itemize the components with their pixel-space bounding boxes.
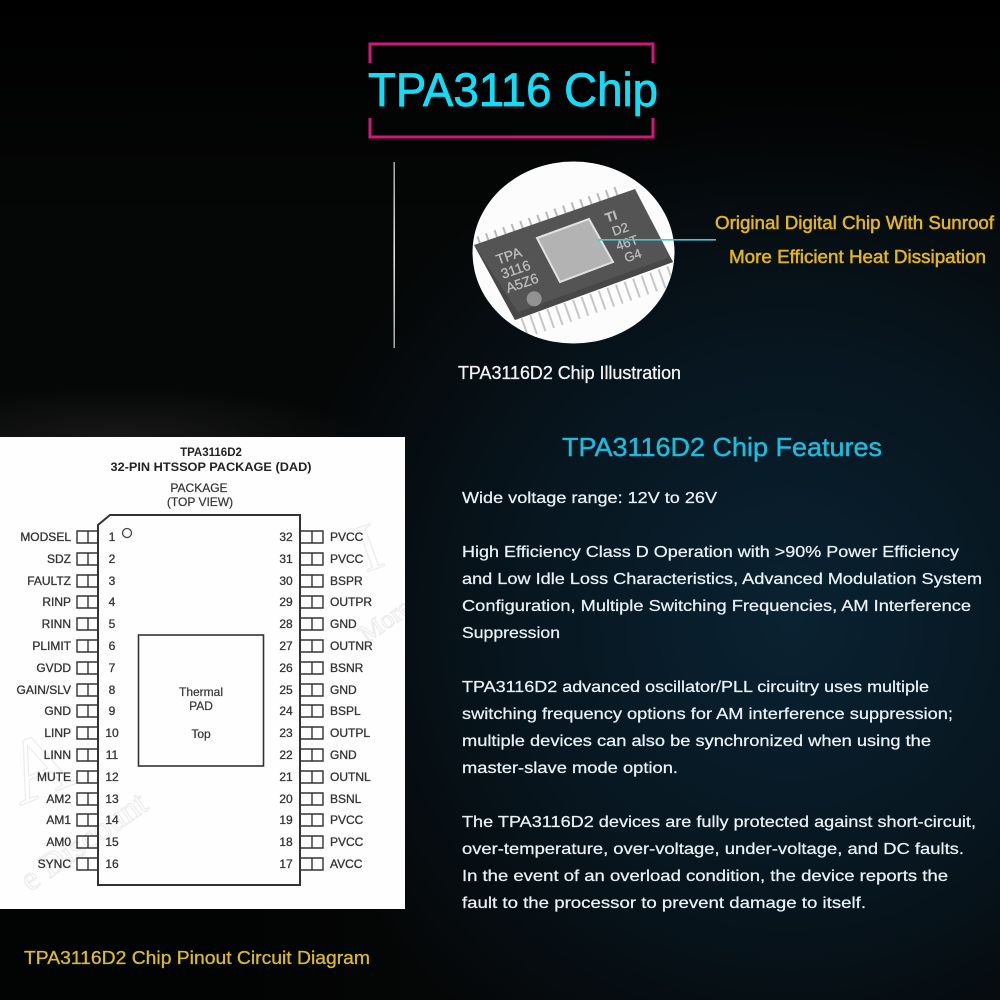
right pins: PVCC <box>330 530 364 544</box>
right pins: 27 <box>279 639 293 653</box>
left pins: SDZ <box>47 552 71 566</box>
right pins: AVCC <box>330 857 363 871</box>
right pins: 21 <box>279 770 293 784</box>
left pins: 7 <box>109 661 116 675</box>
left pins: RINN <box>42 617 71 631</box>
left pins: PLIMIT <box>32 639 72 653</box>
chip marking left: 3116 <box>499 257 533 282</box>
left pins: 5 <box>109 617 116 631</box>
right pins: OUTNL <box>330 770 371 784</box>
pinout diagram panel <box>0 437 416 909</box>
feature: protection: The TPA3116D2 devices are fully protected against short-circuit, <box>462 814 976 831</box>
right pins: 23 <box>279 726 293 740</box>
feature: efficiency: Suppression <box>462 625 560 642</box>
right pins: 19 <box>279 813 293 827</box>
package label: PACKAGE <box>170 481 228 495</box>
left pins: 6 <box>109 639 116 653</box>
left pins: GAIN/SLV <box>17 683 71 697</box>
pin 1 marker <box>122 528 132 538</box>
left pins: SYNC <box>38 857 71 871</box>
thermal pad: Top <box>191 727 211 741</box>
right pins: PVCC <box>330 552 364 566</box>
right pins: 25 <box>279 683 293 697</box>
right pins: OUTPL <box>330 726 370 740</box>
right pins: BSNL <box>330 792 362 806</box>
right pins: PVCC <box>330 813 364 827</box>
left pins: 9 <box>109 704 116 718</box>
chip illustration caption: TPA3116D2 Chip Illustration <box>458 363 681 383</box>
left pins: 8 <box>109 683 116 697</box>
chip marking right: TI <box>603 207 619 225</box>
thermal pad: PAD <box>189 699 213 713</box>
right pins: 18 <box>279 835 293 849</box>
left pins: 1 <box>109 530 116 544</box>
chip marking right: G4 <box>622 245 643 265</box>
chip marking left <box>495 248 542 306</box>
chip marking left: TPA <box>494 244 524 268</box>
right pins: OUTPR <box>330 595 372 609</box>
diagram heading: TPA3116D2 <box>180 447 242 459</box>
left pins: MUTE <box>37 770 71 784</box>
left pins: 3 <box>109 574 116 588</box>
feature: protection: In the event of an overload condition, the device reports the <box>462 868 948 885</box>
features heading: TPA3116D2 Chip Features <box>562 432 882 462</box>
pinout diagram caption: TPA3116D2 Chip Pinout Circuit Diagram <box>24 947 370 968</box>
right pins: GND <box>330 748 357 762</box>
callout text: Original Digital Chip With Sunroof <box>715 213 995 233</box>
left pins: 11 <box>106 748 119 762</box>
chip side <box>474 245 673 320</box>
right pins: BSPL <box>330 704 361 718</box>
title text: TPA3116 Chip <box>368 63 658 116</box>
watermark: e Discount <box>13 784 155 899</box>
right pins: GND <box>330 683 357 697</box>
white disc <box>472 162 674 344</box>
watermark: More <box>354 592 416 649</box>
feature: protection: fault to the processor to prevent damage to itself. <box>462 895 866 912</box>
feature: oscillator: TPA3116D2 advanced oscillator/PLL circuitry uses multiple <box>462 679 929 696</box>
right pins: 22 <box>279 748 293 762</box>
left pins: 15 <box>105 835 119 849</box>
thermal pad <box>138 635 264 766</box>
diagram heading: 32-PIN HTSSOP PACKAGE (DAD) <box>110 462 312 474</box>
left pins: GVDD <box>36 661 71 675</box>
feature: oscillator: multiple devices can also be synchronized when using the <box>462 733 931 750</box>
right pins: 30 <box>279 574 293 588</box>
feature: oscillator <box>462 679 953 777</box>
features text <box>462 490 982 912</box>
feature: efficiency: and Low Idle Loss Characteristics, Advanced Modulation System <box>462 571 982 588</box>
chip marking right: 46T <box>614 232 640 253</box>
chip illustration <box>472 162 716 344</box>
chip pins top <box>478 189 622 241</box>
left pins: RINP <box>42 595 71 609</box>
left pins: LINN <box>44 748 71 762</box>
vertical divider <box>394 162 395 348</box>
left pins <box>17 530 119 871</box>
left pins: 13 <box>105 792 119 806</box>
right pins: PVCC <box>330 835 364 849</box>
chip marking right: D2 <box>610 219 631 239</box>
right pins: 31 <box>279 552 293 566</box>
left pins: 10 <box>105 726 119 740</box>
feature: voltage range: Wide voltage range: 12V to 26V <box>462 490 717 507</box>
left pins: 2 <box>109 552 116 566</box>
left pins: FAULTZ <box>27 574 71 588</box>
right pins <box>279 530 373 871</box>
package label: (TOP VIEW) <box>167 495 233 509</box>
right pins: 32 <box>279 530 293 544</box>
right pins: 29 <box>279 595 293 609</box>
left pins: 4 <box>109 595 116 609</box>
feature: protection <box>462 814 976 912</box>
left pins: 12 <box>105 770 119 784</box>
feature: protection: over-temperature, over-voltage, under-voltage, and DC faults. <box>462 841 964 858</box>
right pins: BSPR <box>330 574 363 588</box>
right pins: BSNR <box>330 661 364 675</box>
right pins: 24 <box>279 704 293 718</box>
right pins: 20 <box>279 792 293 806</box>
feature: oscillator: master-slave mode option. <box>462 760 678 777</box>
chip marking left: A5Z6 <box>504 270 541 296</box>
chip body <box>474 189 673 320</box>
right pins: OUTNR <box>330 639 373 653</box>
callout text: More Efficient Heat Dissipation <box>729 247 986 267</box>
title frame <box>370 44 653 137</box>
feature: efficiency: Configuration, Multiple Switching Frequencies, AM Interference <box>462 598 971 615</box>
feature: efficiency: High Efficiency Class D Operation with >90% Power Efficiency <box>462 544 959 561</box>
right pins: GND <box>330 617 357 631</box>
thermal pad: Thermal <box>179 685 223 699</box>
chip marking right <box>604 210 642 262</box>
right pins: 26 <box>279 661 293 675</box>
right pins: 17 <box>279 857 293 871</box>
diagram heading <box>110 447 312 474</box>
left pins: LINP <box>44 726 71 740</box>
feature: efficiency <box>462 544 982 642</box>
left pins: AM0 <box>46 835 71 849</box>
left pins: 14 <box>105 813 119 827</box>
feature: oscillator: switching frequency options for AM interference suppression; <box>462 706 953 723</box>
callout text <box>715 213 995 267</box>
chip pins bottom <box>524 269 690 328</box>
watermark <box>19 523 405 890</box>
watermark: I <box>345 507 392 587</box>
right pins: 28 <box>279 617 293 631</box>
thermal pad <box>537 219 613 282</box>
left pins: GND <box>44 704 71 718</box>
package label <box>167 481 233 509</box>
package outline <box>98 515 300 885</box>
left pins: 16 <box>105 857 119 871</box>
title: TPA3116 Chip <box>368 44 658 137</box>
left pins: AM2 <box>46 792 71 806</box>
left pins: MODSEL <box>20 530 71 544</box>
pointer line <box>598 239 716 241</box>
left pins: AM1 <box>46 813 71 827</box>
